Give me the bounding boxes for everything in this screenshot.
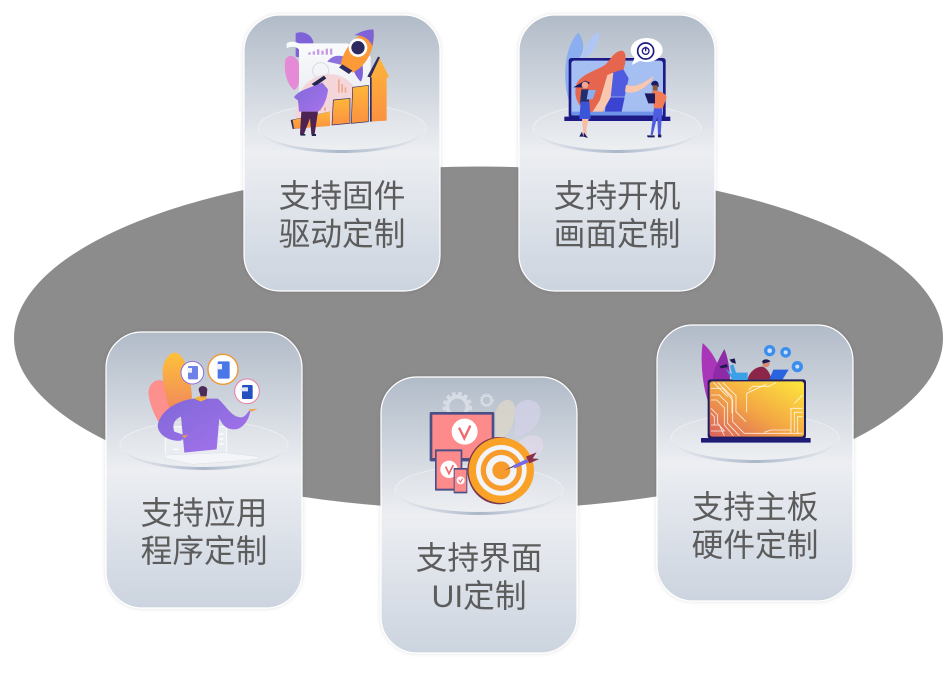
card: firmware driver customization (244, 15, 440, 291)
label line 2: UI定制 (431, 578, 527, 614)
background grey ellipse (14, 166, 943, 510)
platform disc (533, 104, 701, 152)
platform disc (258, 104, 426, 152)
card: application customization (106, 332, 302, 608)
label: 支持固件 (279, 178, 405, 214)
label: 支持开机 (554, 178, 681, 214)
icon: man juggling files (148, 353, 259, 464)
icon: rocket and growth chart (285, 29, 389, 136)
platform rim (395, 490, 563, 515)
icon: presenter on laptop (564, 31, 670, 138)
label: 支持主板 (692, 489, 818, 525)
icon: target and devices (430, 393, 543, 504)
platform disc (395, 466, 563, 514)
label line 2: 程序定制 (141, 533, 267, 569)
icon: circuit laptop with person (701, 343, 811, 443)
label: 支持界面 (416, 540, 542, 576)
label line 2: 驱动定制 (279, 216, 405, 252)
platform rim (258, 128, 426, 153)
platform disc (671, 414, 839, 462)
card: boot screen customization (519, 15, 715, 291)
platform rim (533, 128, 701, 153)
platform disc (120, 421, 288, 469)
platform rim (120, 445, 288, 470)
label line 2: 硬件定制 (692, 527, 818, 563)
card: mainboard hardware customization (657, 325, 853, 601)
platform rim (671, 438, 839, 463)
label line 2: 画面定制 (554, 216, 680, 252)
label: 支持应用 (141, 495, 267, 531)
card: UI customization (381, 377, 577, 653)
